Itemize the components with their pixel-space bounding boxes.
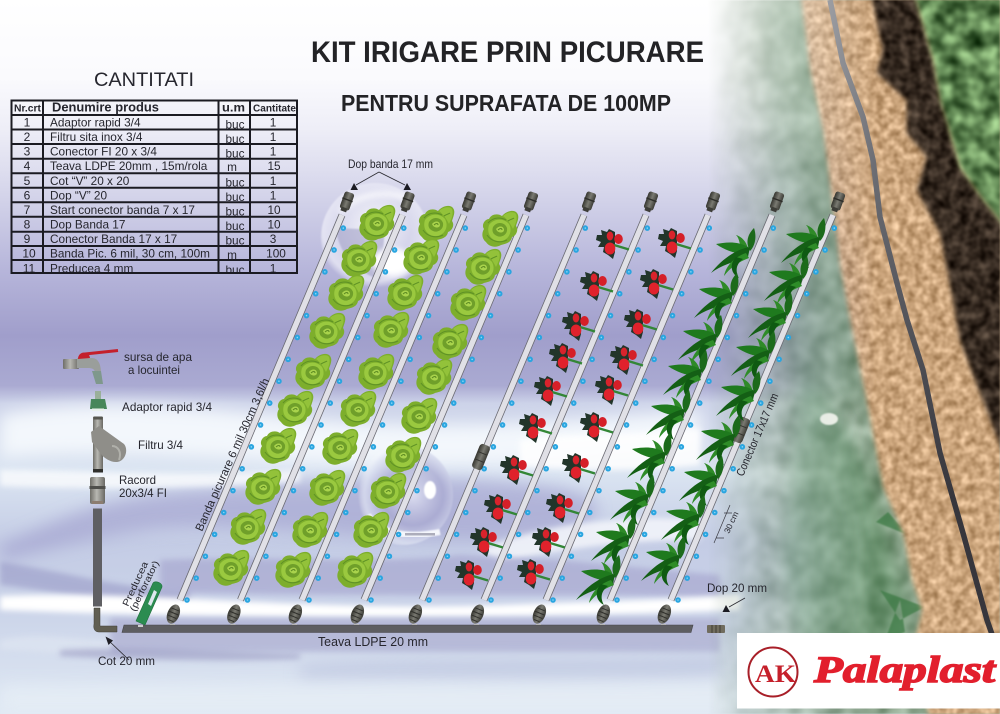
row numbers: 6 [24,188,31,202]
table header row: Cantitate [253,104,296,114]
units: buc [225,219,245,233]
icon: elbow fitting [94,608,117,632]
label: elbow with arrow [98,636,155,668]
units: buc [225,204,245,218]
row numbers: 11 [23,262,36,276]
foliage left of soil [700,0,1000,714]
label: water source: sursa de apa [124,351,193,364]
row numbers: 4 [24,159,31,173]
row numbers: 2 [24,130,31,144]
lettuce rows [213,205,518,588]
label: pipe end cap with arrow [707,582,767,612]
label: filter: Filtru 3/4 [138,438,183,452]
row numbers: 1 [24,116,31,130]
row numbers: 9 [24,232,31,246]
label: tape stoppers with arrows: Dop banda 17 mm [348,158,433,171]
product names: Dop Banda 17 [50,217,125,231]
product names: Conector FI 20 x 3/4 [50,144,157,158]
units: buc [225,132,245,146]
product names: Start conector banda 7 x 17 [50,203,195,217]
product names: Teava LDPE 20mm , 15m/rola [50,159,208,173]
product names [50,116,210,276]
dimension: emitter spacing 30 cm: 30 cm [722,510,740,535]
product names: Preducea 4 mm [50,262,133,276]
quantities: 3 [270,232,277,246]
quantities [266,116,286,276]
main LDPE pipe [122,625,693,632]
product names: Dop “V” 20 [50,188,107,202]
label: water source [124,351,193,377]
vertical pipe [93,508,102,606]
label: elbow with arrow: Cot 20 mm [98,655,155,668]
quantities: 1 [270,116,276,130]
table heading: CANTITATI [94,69,194,91]
product names: Cot “V” 20 x 20 [50,174,130,188]
row numbers [22,116,36,276]
label: racord [119,473,167,500]
label: tape stoppers with arrows [348,158,433,190]
shaded soil [869,0,1000,452]
label: main pipe: Teava LDPE 20 mm [318,634,428,649]
green plant rows [576,218,825,605]
units: buc [225,234,245,248]
soil strip [780,0,1000,714]
product names: Banda Pic. 6 mil, 30 cm, 100m [50,246,210,260]
label: racord: 20x3/4 FI [119,486,167,500]
units [225,118,245,277]
units: buc [225,176,245,190]
units: buc [225,118,245,132]
row numbers: 7 [24,203,31,217]
logo emblem AK [748,648,798,696]
subtitle: PENTRU SUPRAFATA DE 100MP [341,90,671,116]
label: water source: a locuintei [128,364,180,377]
product names: Filtru sita inox 3/4 [50,130,143,144]
quantities: 10 [267,203,281,217]
icon: quick adapter [90,391,107,411]
units: buc [225,263,245,277]
table header row: u.m [222,100,245,114]
icon: filter [91,416,126,472]
quantities: 1 [270,262,276,276]
label: perforator: (perforator) [128,559,161,613]
label: racord: Racord [119,473,156,487]
label: perforator [121,559,161,613]
photo: foliage, soil, irrigation hose [700,0,1000,714]
icon: water tap [63,350,118,384]
title: KIT IRIGARE PRIN PICURARE [311,36,704,69]
product names: Adaptor rapid 3/4 [50,116,141,130]
icon: pipe end cap [707,625,725,633]
label: tape connector: Conector 17x17 mm [735,392,781,478]
logo panel [737,633,1000,708]
units: m [227,248,237,262]
rose rows [455,228,691,590]
icon: racord fitting [90,477,106,504]
row numbers: 3 [24,144,31,158]
logo emblem AK: AK [755,661,797,688]
row numbers: 10 [22,246,36,260]
top right foliage [914,0,1000,224]
row numbers: 8 [24,217,31,231]
icon: perforator tool [136,582,162,627]
table: quantities [12,100,297,277]
table header row: Denumire produs [52,100,159,114]
water drop bottom [353,445,453,545]
quantities: 10 [267,217,281,231]
quantities: 1 [270,174,276,188]
quantities: 1 [270,130,276,144]
table header row: Nr.crt [14,104,42,114]
quantities: 1 [270,188,276,202]
tape connector fittings [471,416,751,471]
quantities: 100 [266,246,286,260]
drip tapes with emitters and end fittings [164,191,846,626]
quantities: 1 [270,144,276,158]
table header row [14,100,296,114]
label: quick adapter: Adaptor rapid 3/4 [122,400,212,414]
label: perforator: Preducea [121,559,151,608]
units: buc [225,146,245,160]
units: m [227,160,237,174]
label: pipe end cap with arrow: Dop 20 mm [707,582,767,595]
logo wordmark: Palaplast [813,650,997,691]
dimension: emitter spacing 30 cm [714,505,740,543]
units: buc [225,190,245,204]
product names: Conector Banda 17 x 17 [50,232,177,246]
quantities: 15 [267,159,281,173]
water drop top [321,183,429,291]
row numbers: 5 [24,174,31,188]
label: drip tape: Banda picurare 6 mil 30cm 3,6l/h [194,377,272,533]
